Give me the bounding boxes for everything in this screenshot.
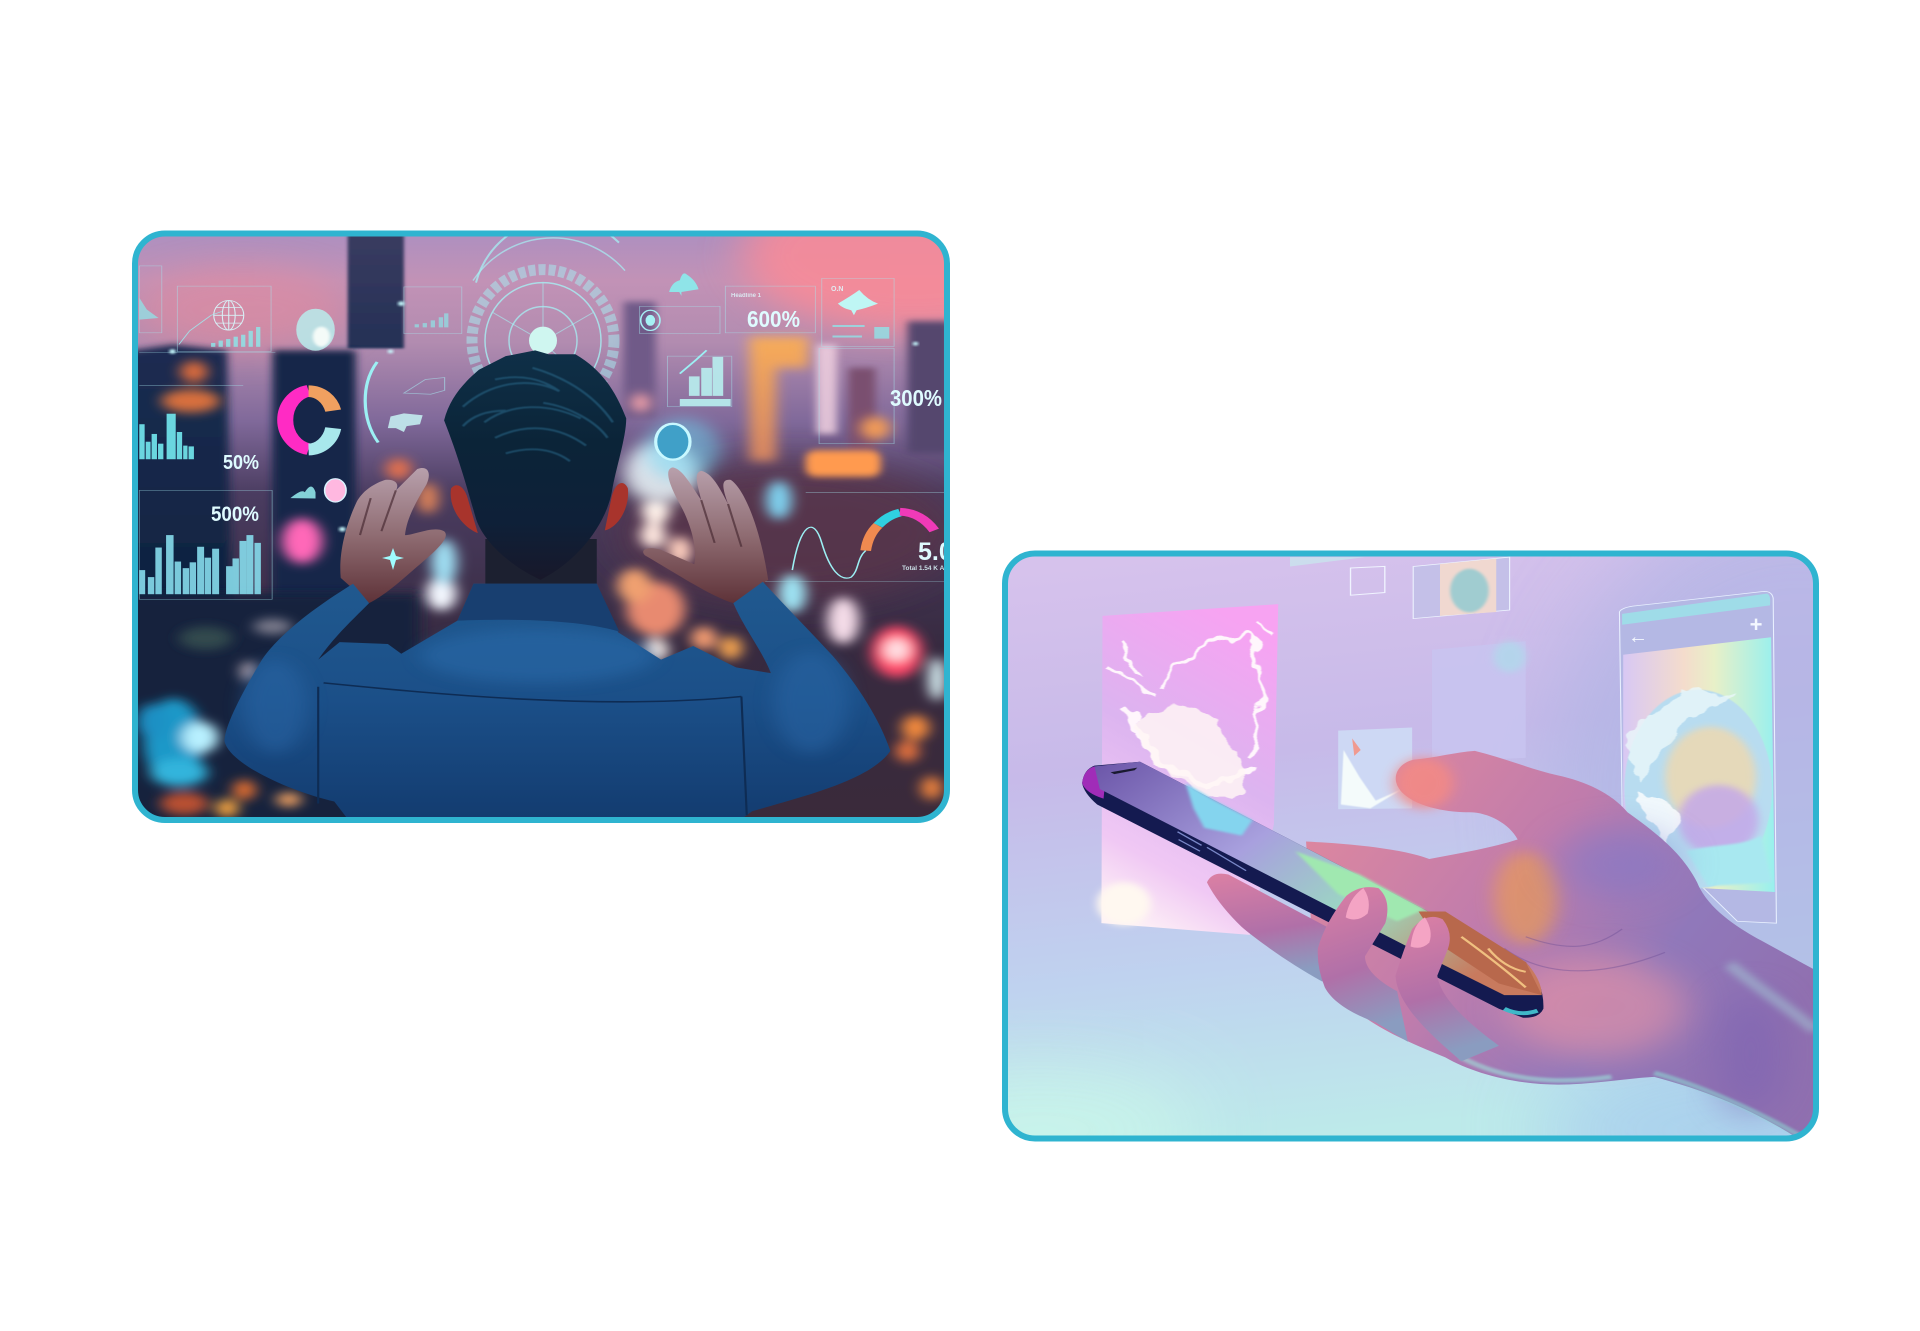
ears: [451, 483, 628, 533]
city background with blurred bokeh: [132, 236, 950, 817]
shirt: [224, 582, 890, 819]
chart value labels: [211, 286, 958, 572]
top thumbnail card: [1413, 557, 1510, 619]
chart value labels: 50%: [223, 452, 259, 474]
panel border: [1005, 554, 1816, 1138]
holographic charts and widgets: [139, 266, 945, 599]
faint top strip: [1290, 557, 1365, 566]
floating gallery cards: [1097, 557, 1776, 935]
infographic canvas: [132, 230, 1819, 1142]
large pink swirl card: [1097, 604, 1278, 935]
chart value labels: 600%: [747, 306, 800, 332]
chart value labels: 300%: [890, 385, 942, 411]
panel: analyst with holographic dashboard: [132, 230, 950, 823]
sparkle on hand: [382, 548, 404, 570]
chart value labels: 5.0: [918, 538, 953, 566]
chart value labels: Total 1.54 K Asset: [902, 565, 958, 572]
holographic radar rings: [466, 236, 626, 382]
sparkles: [169, 301, 918, 532]
hair: [444, 350, 626, 580]
right hand: [643, 467, 768, 603]
panel border: [135, 234, 947, 820]
line graph and arc accents: [179, 311, 866, 578]
target and pin icons: [325, 310, 720, 504]
chart value labels: O.N: [831, 286, 843, 293]
man seen from behind: [224, 350, 890, 819]
faint centre card: [1432, 641, 1526, 762]
empty outline card: [1351, 566, 1385, 595]
donut chart: [285, 391, 333, 450]
chart value labels: 500%: [211, 503, 259, 526]
small ice card: [1338, 727, 1412, 809]
pastel gradient background: [1008, 556, 1813, 1136]
app bar icons: [1632, 618, 1762, 642]
app bar icons: ←: [1628, 626, 1648, 648]
gauge arc: [866, 512, 934, 551]
hand palm and thumb: [1306, 751, 1815, 1139]
chart value labels: Headline 1: [731, 293, 762, 299]
globe icon: [214, 301, 244, 330]
neck: [485, 539, 597, 588]
smartphone: [1082, 762, 1543, 1018]
panel: hand holding smartphone with floating cards: [1002, 550, 1819, 1142]
left hand: [340, 468, 446, 603]
app bar icons: +: [1750, 612, 1762, 637]
fingers under phone: [1207, 874, 1499, 1061]
right phone mockup card: [1619, 591, 1776, 923]
